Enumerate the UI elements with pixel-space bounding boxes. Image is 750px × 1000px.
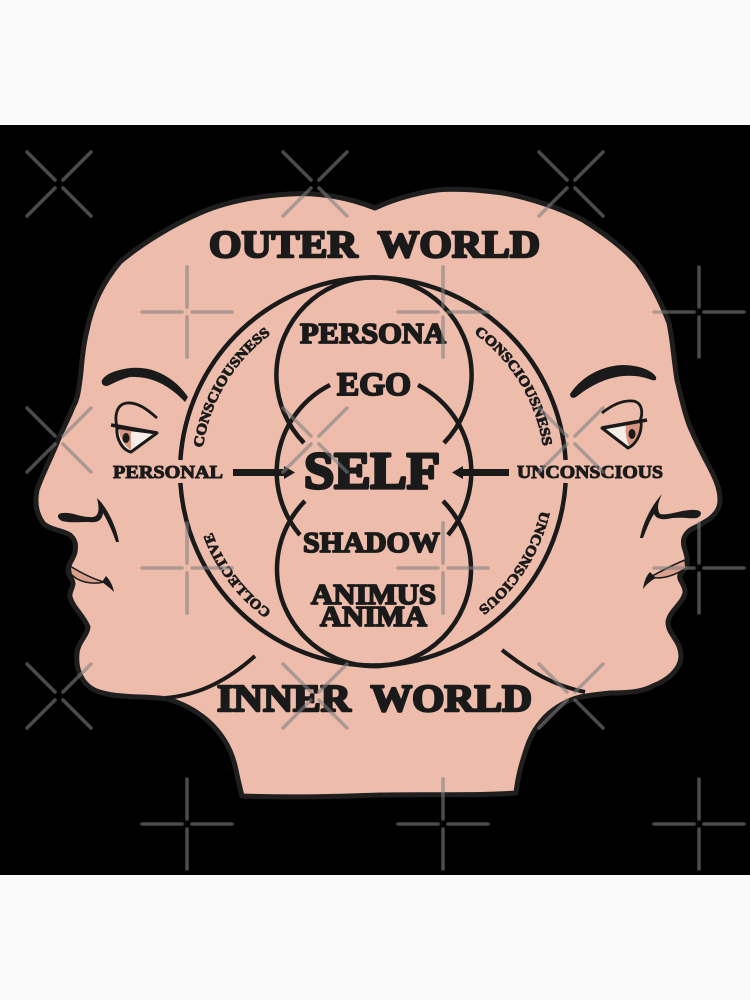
curved label: collective: COLLECTIVE [203,532,270,617]
right face features [570,365,701,589]
left eye [111,403,157,452]
two-faced head silhouette [36,189,720,797]
curved label: consciousness left: CONSCIOUSNESS [194,327,270,447]
ego and shadow circle arc left [277,385,330,535]
curved label: consciousness right: CONSCIOUSNESS [476,327,552,446]
Jungian diagram circles [180,277,566,666]
heading: outer world: OUTER WORLD [209,224,540,266]
label: personal: PERSONAL [113,462,223,482]
right eyebrow [570,365,656,398]
jaw line left [165,656,255,698]
left mouth [70,566,114,592]
watermark crosses [27,152,744,869]
label: persona: PERSONA [300,318,446,350]
label: shadow: SHADOW [303,527,440,559]
arrow: personal to self [233,466,295,479]
label: ego: EGO [337,367,411,403]
label: self: SELF [304,443,440,500]
label: anima: ANIMA [320,602,428,633]
jaw line right [502,650,585,692]
heading: inner world: INNER WORLD [217,678,532,720]
left face features [58,368,188,592]
left eyebrow [102,368,188,402]
right eye [602,401,647,448]
label: unconscious: UNCONSCIOUS [517,462,663,482]
curved label: unconscious lower right: UNCONSCIOUS [479,512,550,615]
right nose [640,494,701,538]
arrow: unconscious to self [452,466,509,479]
persona circle arc [276,277,472,443]
ego and shadow circle arc right [418,385,471,535]
outer circle [180,278,566,665]
background panel [0,125,750,875]
shadow and anima circle arc [277,501,471,666]
left nose [58,498,119,542]
right mouth [643,560,686,589]
label: animus: ANIMUS [311,580,436,611]
